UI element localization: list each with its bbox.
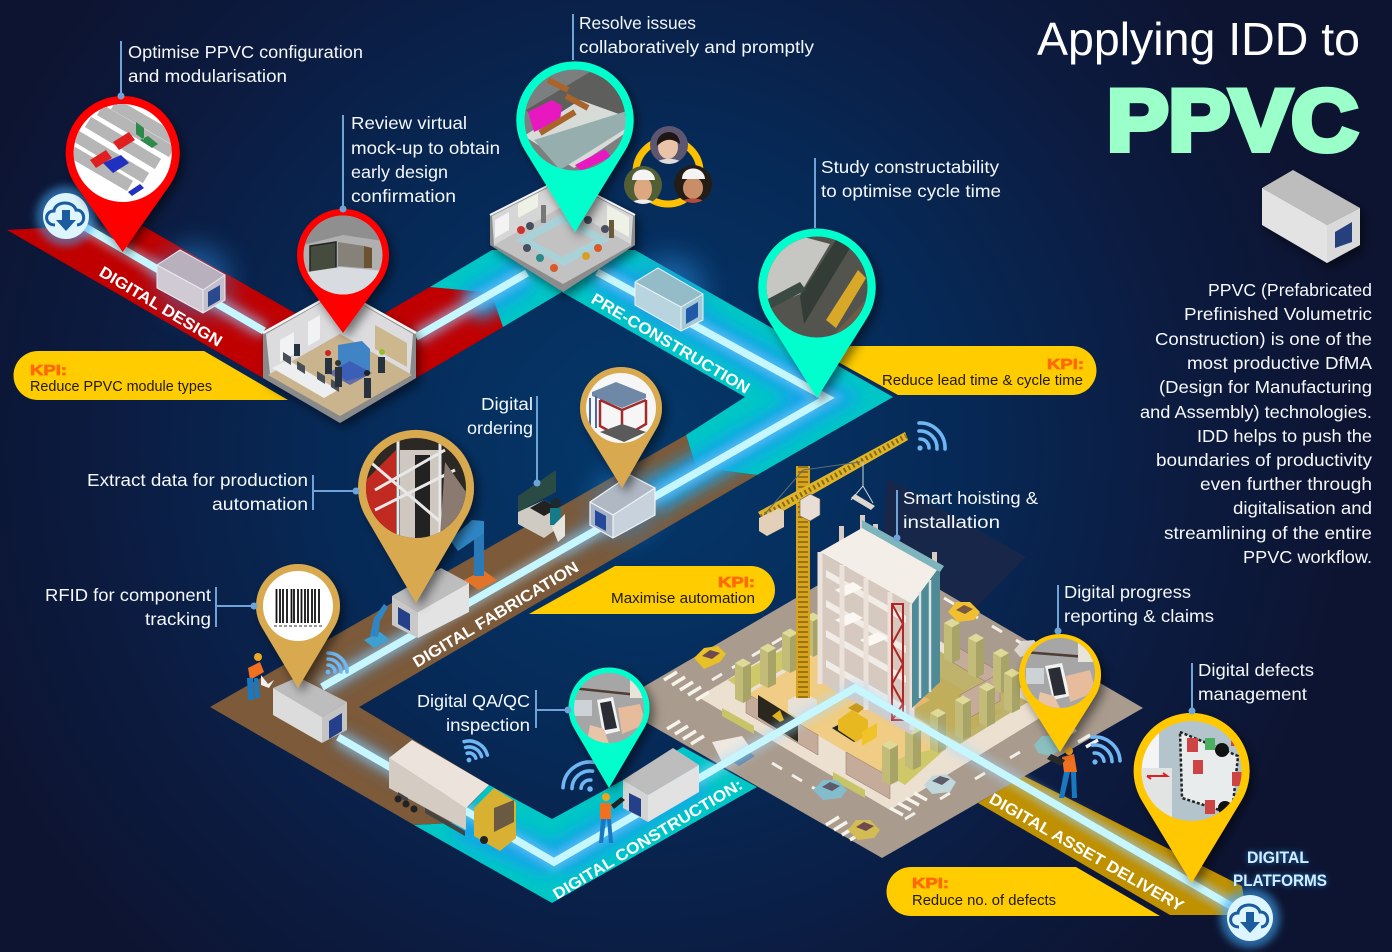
cloud icon: start	[36, 186, 96, 246]
KPI: reduce lead time and cycle time	[838, 346, 1096, 395]
central model	[338, 341, 370, 381]
yellow ground	[748, 630, 1002, 778]
desks	[272, 360, 338, 398]
base	[263, 290, 416, 423]
roof slab	[820, 528, 940, 604]
title: PPVC	[1107, 73, 1358, 169]
counterweight	[759, 508, 784, 536]
callout: production automation: Extract data for production	[87, 470, 308, 490]
callout: optimise configuration: and modularisation	[128, 66, 287, 86]
crane mast	[796, 466, 810, 698]
crosswalks	[664, 672, 1098, 840]
callout: virtual mock-up: Review virtual	[351, 113, 467, 133]
faint shadow behind tower	[880, 478, 1026, 622]
callout: virtual mock-up: early design	[351, 162, 448, 182]
callout: optimise configuration: Optimise PPVC configuration	[128, 42, 363, 62]
label: digital platforms: PLATFORMS	[1233, 872, 1327, 890]
floor	[268, 334, 412, 416]
callout: optimise configuration	[118, 41, 363, 100]
road glow along data line	[150, 264, 1250, 917]
glass roof edge	[862, 520, 944, 572]
red scaffold	[892, 604, 903, 720]
pin: production automation	[358, 430, 474, 603]
worker: RFID scan	[247, 653, 274, 700]
KPI: reduce PPVC module types	[13, 351, 288, 400]
callout: QA/QC inspection	[417, 690, 572, 735]
window	[495, 212, 509, 238]
KPI: reduce PPVC module types: KPI:	[30, 362, 67, 379]
avatar: designer	[650, 126, 688, 164]
road label: digital fabrication: DIGITAL FABRICATION	[410, 559, 582, 671]
module box: digital construction	[623, 748, 699, 822]
window	[280, 315, 320, 362]
module box: RFID tracking	[273, 677, 347, 743]
KPI: maximise automation: Maximise automation	[611, 591, 755, 607]
road: digital fabrication	[210, 435, 757, 825]
description text: streamlining of the entire	[1164, 523, 1372, 543]
wifi: truck	[462, 737, 488, 763]
callout: smart hoisting: Smart hoisting &	[903, 488, 1038, 508]
callout: virtual mock-up: mock-up to obtain	[351, 138, 500, 158]
room: virtual mock-up review	[263, 290, 416, 423]
conference table	[516, 214, 610, 266]
trailer	[389, 740, 489, 808]
pin: optimise configuration	[66, 96, 180, 252]
callout: production automation: automation	[212, 494, 308, 514]
description text: IDD helps to push the	[1197, 426, 1372, 446]
wall board	[375, 325, 407, 367]
description text: Prefinished Volumetric	[1184, 304, 1372, 324]
robot arm: production line	[450, 520, 497, 590]
callout: constructability: Study constructability	[821, 157, 999, 177]
city block	[614, 552, 1143, 858]
glass face	[912, 566, 940, 708]
KPI: reduce no. of defects: Reduce no. of defects	[912, 893, 1056, 909]
worker: QA inspection	[599, 793, 625, 843]
callout: resolve issues: Resolve issues	[579, 13, 696, 33]
tower crane	[758, 432, 908, 720]
trees	[735, 612, 1020, 785]
crane stays	[764, 462, 860, 515]
data line	[66, 216, 1250, 917]
description text: most productive DfMA	[1187, 353, 1372, 373]
description text: even further through	[1200, 474, 1372, 494]
left face	[820, 552, 912, 735]
truck	[389, 740, 516, 851]
wifi icons	[326, 423, 1120, 792]
callout: progress reporting	[1054, 582, 1214, 634]
callout: RFID tracking	[45, 585, 258, 629]
callout: defects management: Digital defects	[1198, 660, 1314, 680]
hook and load	[851, 461, 875, 510]
callout: smart hoisting: installation	[903, 512, 1000, 532]
floor	[494, 206, 632, 284]
label: digital platforms: DIGITAL	[1247, 849, 1309, 867]
road: pre-construction	[430, 250, 893, 475]
people	[294, 344, 385, 398]
module box: digital ordering	[590, 475, 655, 538]
back walls	[492, 180, 633, 246]
road label: digital asset delivery: DIGITAL ASSET DELIVERY	[986, 791, 1187, 915]
attendees	[517, 205, 614, 272]
wifi: crane	[917, 423, 945, 451]
road: digital asset delivery	[978, 776, 1245, 915]
cars	[694, 602, 1060, 840]
bulldozer	[832, 702, 877, 746]
callout: QA/QC inspection: inspection	[446, 715, 530, 735]
module box: production	[392, 568, 469, 638]
title: Applying IDD to	[1037, 13, 1360, 65]
callout: constructability: to optimise cycle time	[821, 181, 1001, 201]
concrete kerbs	[722, 708, 865, 798]
callout: digital ordering: ordering	[467, 418, 533, 438]
cab	[474, 788, 516, 851]
whiteboards	[518, 193, 629, 237]
module box: digital design	[157, 250, 225, 313]
callout: progress reporting: Digital progress	[1064, 582, 1191, 602]
connection ring	[636, 140, 700, 204]
base	[490, 178, 635, 292]
KPI: maximise automation	[529, 566, 775, 614]
pin: RFID barcode	[256, 564, 340, 688]
callout: RFID tracking: RFID for component	[45, 585, 211, 605]
robot arm: assembly	[364, 604, 390, 648]
callout: virtual mock-up: confirmation	[351, 186, 456, 206]
description text: (Design for Manufacturing	[1159, 377, 1372, 397]
crane jib	[758, 432, 908, 522]
icon: PPVC module	[1262, 170, 1360, 263]
wifi: QA	[563, 760, 595, 792]
city ground	[614, 552, 1143, 858]
wifi: RFID	[326, 653, 347, 674]
pin: progress reporting	[1019, 634, 1101, 752]
road label: digital design: DIGITAL DESIGN	[96, 264, 225, 351]
worker: progress reporting	[1047, 747, 1077, 798]
road label: pre-construction: PRE-CONSTRUCTION	[588, 291, 752, 398]
columns above roof	[839, 515, 937, 575]
description text	[1140, 280, 1372, 567]
module box: pre-construction	[635, 268, 703, 331]
avatar: engineer right	[674, 165, 712, 203]
callout: smart hoisting	[894, 488, 1038, 542]
callout: defects management	[1188, 660, 1314, 714]
avatar: engineer left	[624, 166, 662, 204]
KPI: reduce lead time and cycle time: Reduce lead time & cycle time	[882, 373, 1083, 389]
fence	[746, 640, 1005, 799]
callout: QA/QC inspection: Digital QA/QC	[417, 691, 530, 711]
billboard	[758, 695, 798, 742]
description text: digitalisation and	[1233, 498, 1372, 518]
pin: resolve issues	[516, 61, 634, 232]
KPI: reduce PPVC module types: Reduce PPVC module types	[30, 379, 212, 395]
pin: constructability	[758, 229, 876, 398]
callout: resolve issues	[573, 13, 814, 60]
callout: constructability	[815, 157, 1001, 228]
pin: QA/QC inspection	[568, 667, 650, 788]
callout: virtual mock-up	[340, 113, 500, 212]
pin: defects management	[1134, 713, 1250, 883]
ground shadow	[820, 680, 930, 722]
callout: defects management: management	[1198, 684, 1307, 704]
label: digital platforms	[1233, 849, 1327, 890]
site plot	[698, 598, 1056, 810]
building under construction	[820, 515, 944, 735]
pin: digital ordering	[580, 367, 662, 488]
description text: PPVC (Prefabricated	[1208, 280, 1372, 300]
description text: boundaries of productivity	[1156, 450, 1372, 470]
room: collaboration meeting	[490, 178, 635, 292]
glow: behind boxes	[161, 246, 704, 537]
line core	[66, 216, 1250, 917]
back walls	[266, 292, 413, 374]
description text: and Assembly) technologies.	[1140, 402, 1372, 422]
callout: digital ordering: Digital	[481, 394, 533, 414]
KPI: reduce no. of defects	[886, 867, 1160, 916]
wifi: progress	[1090, 735, 1120, 765]
KPI: reduce no. of defects: KPI:	[912, 875, 949, 892]
road: digital construction	[414, 747, 757, 903]
crane base	[788, 692, 817, 720]
callout: progress reporting: reporting & claims	[1064, 606, 1214, 626]
road: digital design	[7, 226, 503, 382]
line glow	[66, 216, 1250, 917]
road dashes	[712, 598, 1076, 819]
callout: RFID tracking: tracking	[145, 609, 211, 629]
callout: production automation	[87, 470, 360, 514]
digital ordering workstation	[518, 470, 565, 542]
KPI: reduce lead time and cycle time: KPI:	[1047, 356, 1084, 373]
title	[1037, 13, 1360, 169]
description text: PPVC workflow.	[1243, 547, 1372, 567]
project team avatars	[624, 126, 712, 204]
pin: virtual mock-up	[297, 209, 389, 333]
callout: digital ordering	[467, 394, 540, 486]
callout: resolve issues: collaboratively and promptly	[579, 37, 814, 57]
cloud icon: end	[1220, 888, 1280, 948]
road label: digital construction: DIGITAL CONSTRUCTION:	[550, 777, 746, 903]
description text: Construction) is one of the	[1155, 329, 1372, 349]
crane cab	[800, 494, 820, 521]
KPI: maximise automation: KPI:	[718, 574, 755, 591]
